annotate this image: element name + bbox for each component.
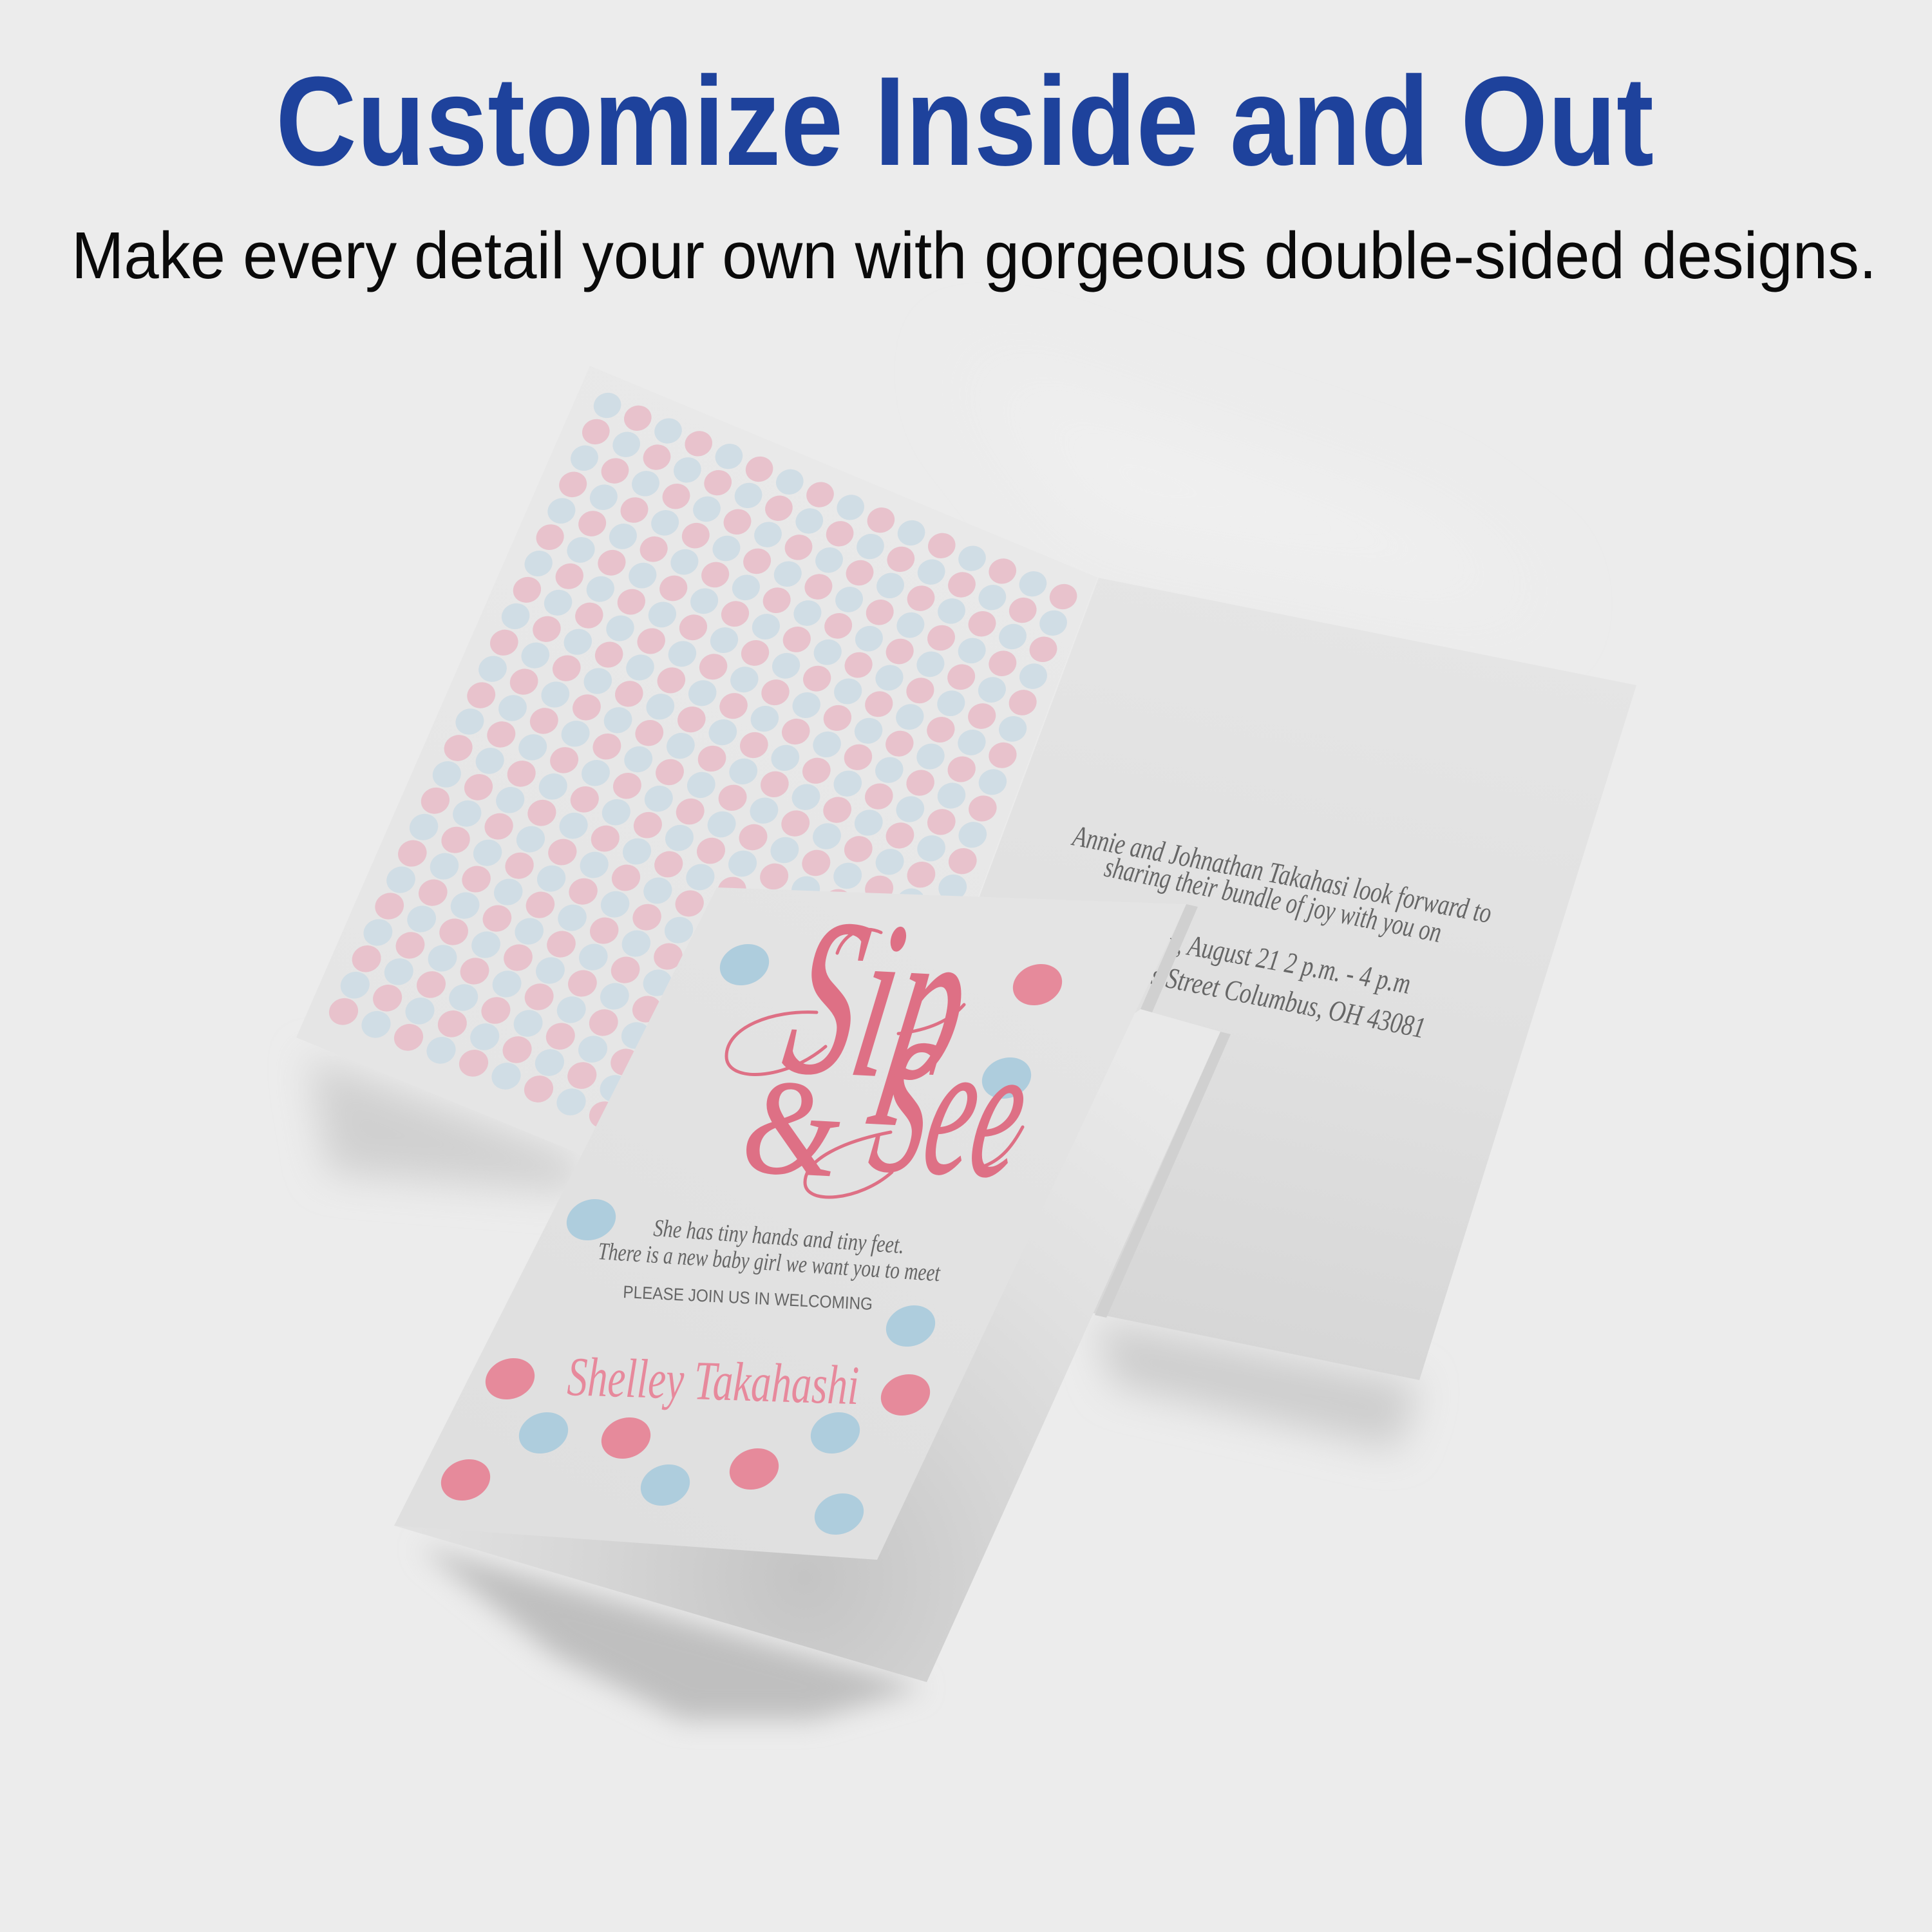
heading: Sip and See (739, 872, 1044, 1218)
title: Customize Inside and Out (276, 50, 1654, 192)
front paper (394, 887, 1186, 1560)
panel: inside left with dot pattern (296, 366, 1098, 1262)
verse text (597, 1215, 942, 1287)
heading: Sip and See: & (739, 1051, 844, 1206)
inside right paper (842, 578, 1636, 1380)
panel: inside right with message (842, 578, 1636, 1380)
baby name: Shelley Takahashi (566, 1345, 860, 1416)
shadow: under inside card right (1095, 1320, 1419, 1449)
panel: folded card back flap (394, 1009, 1220, 1682)
message text: s Street Columbus, OH 43081 (1149, 958, 1428, 1045)
heading: Sip and See: See (858, 999, 1044, 1218)
message text: y, August 21 2 p.m. - 4 p.m (1164, 925, 1413, 1000)
cast shadow: back flap on inside (1095, 1032, 1231, 1318)
panel: folded card front (394, 872, 1186, 1560)
verse text: There is a new baby girl we want you to meet (597, 1238, 942, 1287)
dot pattern (318, 381, 1088, 1231)
message text (1069, 819, 1494, 1045)
message text: sharing their bundle of joy with you on (1102, 850, 1444, 949)
front dots (435, 938, 1068, 1541)
message text: Annie and Johnathan Takahasi look forward to (1069, 819, 1494, 929)
shadow: under inside card left (309, 1056, 580, 1191)
welcome line: PLEASE JOIN US IN WELCOMING (623, 1282, 873, 1314)
subtitle: Make every detail your own with gorgeous double-sided designs. (71, 218, 1877, 292)
shadow: under folded card (419, 1546, 924, 1719)
flourish strokes (726, 929, 1023, 1197)
verse text: She has tiny hands and tiny feet. (652, 1215, 905, 1259)
inside left paper (296, 366, 1098, 1262)
heading: Sip and See: Sip (770, 872, 988, 1128)
cast shadow: front card on inside (1141, 904, 1198, 1012)
